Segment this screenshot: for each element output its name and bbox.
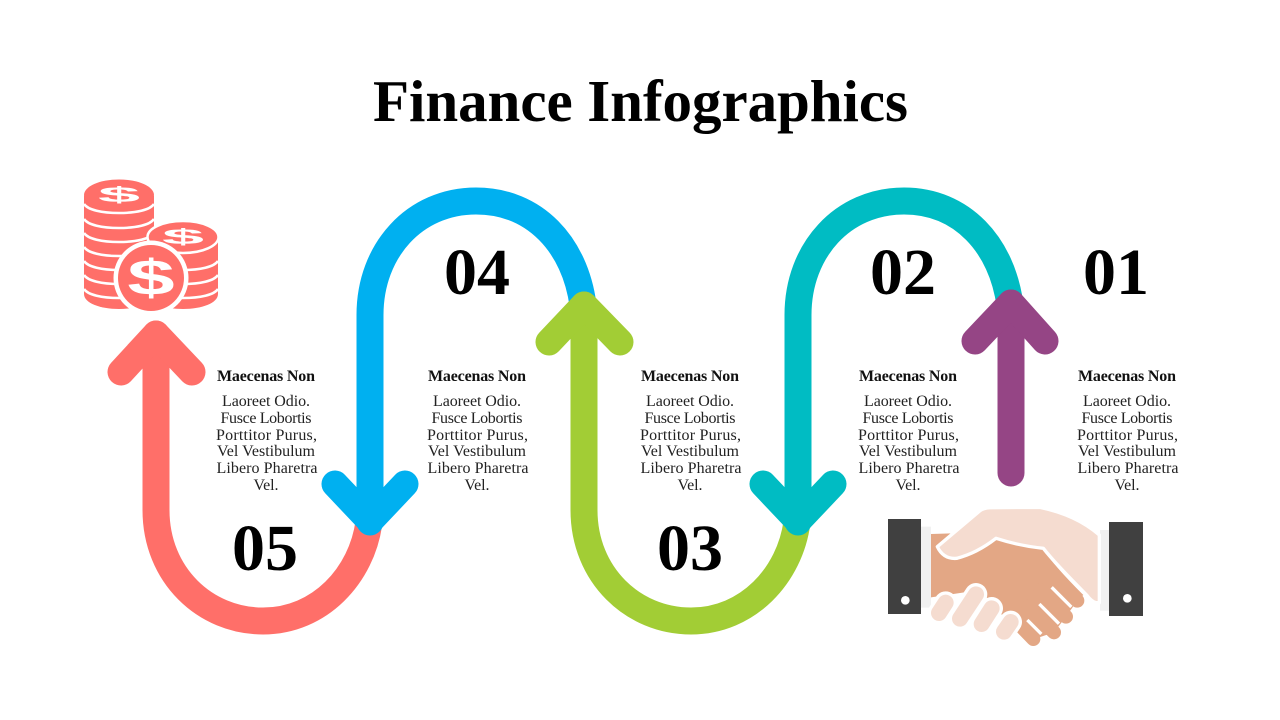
left sleeve bbox=[888, 519, 921, 614]
body text bbox=[427, 393, 528, 494]
number 01: 01 bbox=[1083, 236, 1149, 309]
number 04: 04 bbox=[444, 236, 510, 309]
text block: step 04 bbox=[427, 368, 528, 494]
text block: step 01 bbox=[1077, 368, 1178, 494]
body text: Laoreet Odio. bbox=[222, 393, 310, 410]
text block: step 05 bbox=[216, 368, 318, 494]
body text: Fusce Lobortis bbox=[220, 410, 312, 427]
arrow: step 05 red bbox=[121, 334, 369, 621]
body text: Porttitor Purus, bbox=[427, 427, 528, 444]
heading: Maecenas Non bbox=[859, 368, 957, 385]
body text: Fusce Lobortis bbox=[1082, 410, 1172, 427]
body text: Libero Pharetra bbox=[428, 460, 528, 477]
right coin stack: $ bbox=[162, 225, 204, 249]
body text bbox=[1077, 393, 1178, 494]
body text: Laoreet Odio. bbox=[1083, 393, 1171, 410]
arrow: step 03 green bbox=[549, 305, 797, 621]
body text: Vel. bbox=[896, 477, 920, 494]
body text: Vel Vestibulum bbox=[641, 443, 740, 460]
tan lower hand bbox=[931, 533, 1083, 639]
left coin stack: $ bbox=[98, 183, 140, 207]
heading: Maecenas Non bbox=[428, 368, 526, 385]
body text: Vel Vestibulum bbox=[428, 443, 527, 460]
body text: Fusce Lobortis bbox=[432, 410, 522, 427]
number 02: 02 bbox=[870, 236, 936, 309]
heading: Maecenas Non bbox=[1078, 368, 1176, 385]
body text bbox=[640, 393, 742, 494]
body text: Libero Pharetra bbox=[640, 460, 742, 477]
body text: Porttitor Purus, bbox=[1077, 427, 1178, 444]
arrow: step 01 purple bbox=[975, 303, 1045, 473]
body text: Fusce Lobortis bbox=[644, 410, 736, 427]
heading: Maecenas Non bbox=[217, 368, 315, 385]
body text: Laoreet Odio. bbox=[433, 393, 521, 410]
body text: Vel. bbox=[464, 477, 490, 494]
body text: Vel Vestibulum bbox=[217, 443, 316, 460]
number 05: 05 bbox=[232, 512, 298, 585]
body text: Libero Pharetra bbox=[858, 460, 960, 477]
light fingers bbox=[939, 594, 1011, 632]
body text: Fusce Lobortis bbox=[862, 410, 954, 427]
body text bbox=[216, 393, 318, 494]
arrow: step 04 blue bbox=[335, 201, 583, 522]
left cuff bbox=[921, 527, 931, 608]
number 03: 03 bbox=[657, 512, 723, 585]
body text: Vel Vestibulum bbox=[859, 443, 958, 460]
right cuff bbox=[1100, 530, 1109, 611]
body text: Vel Vestibulum bbox=[1078, 443, 1177, 460]
body text bbox=[858, 393, 960, 494]
text block: step 02 bbox=[858, 368, 960, 494]
heading: Maecenas Non bbox=[641, 368, 739, 385]
title: Finance Infographics bbox=[373, 68, 908, 134]
body text: Porttitor Purus, bbox=[858, 427, 959, 444]
body text: Vel. bbox=[254, 477, 278, 494]
light upper hand bbox=[937, 507, 1099, 603]
right sleeve bbox=[1109, 522, 1143, 616]
icon: handshake bbox=[888, 507, 1143, 639]
icon: coin stacks bbox=[84, 180, 218, 316]
body text: Libero Pharetra bbox=[216, 460, 318, 477]
front coin: $ bbox=[127, 250, 175, 306]
body text: Libero Pharetra bbox=[1078, 460, 1178, 477]
body text: Vel. bbox=[678, 477, 702, 494]
arrow: step 02 teal bbox=[763, 201, 1010, 522]
body text: Porttitor Purus, bbox=[640, 427, 741, 444]
body text: Porttitor Purus, bbox=[216, 427, 317, 444]
body text: Laoreet Odio. bbox=[646, 393, 734, 410]
text block: step 03 bbox=[640, 368, 742, 494]
body text: Laoreet Odio. bbox=[864, 393, 952, 410]
body text: Vel. bbox=[1114, 477, 1140, 494]
